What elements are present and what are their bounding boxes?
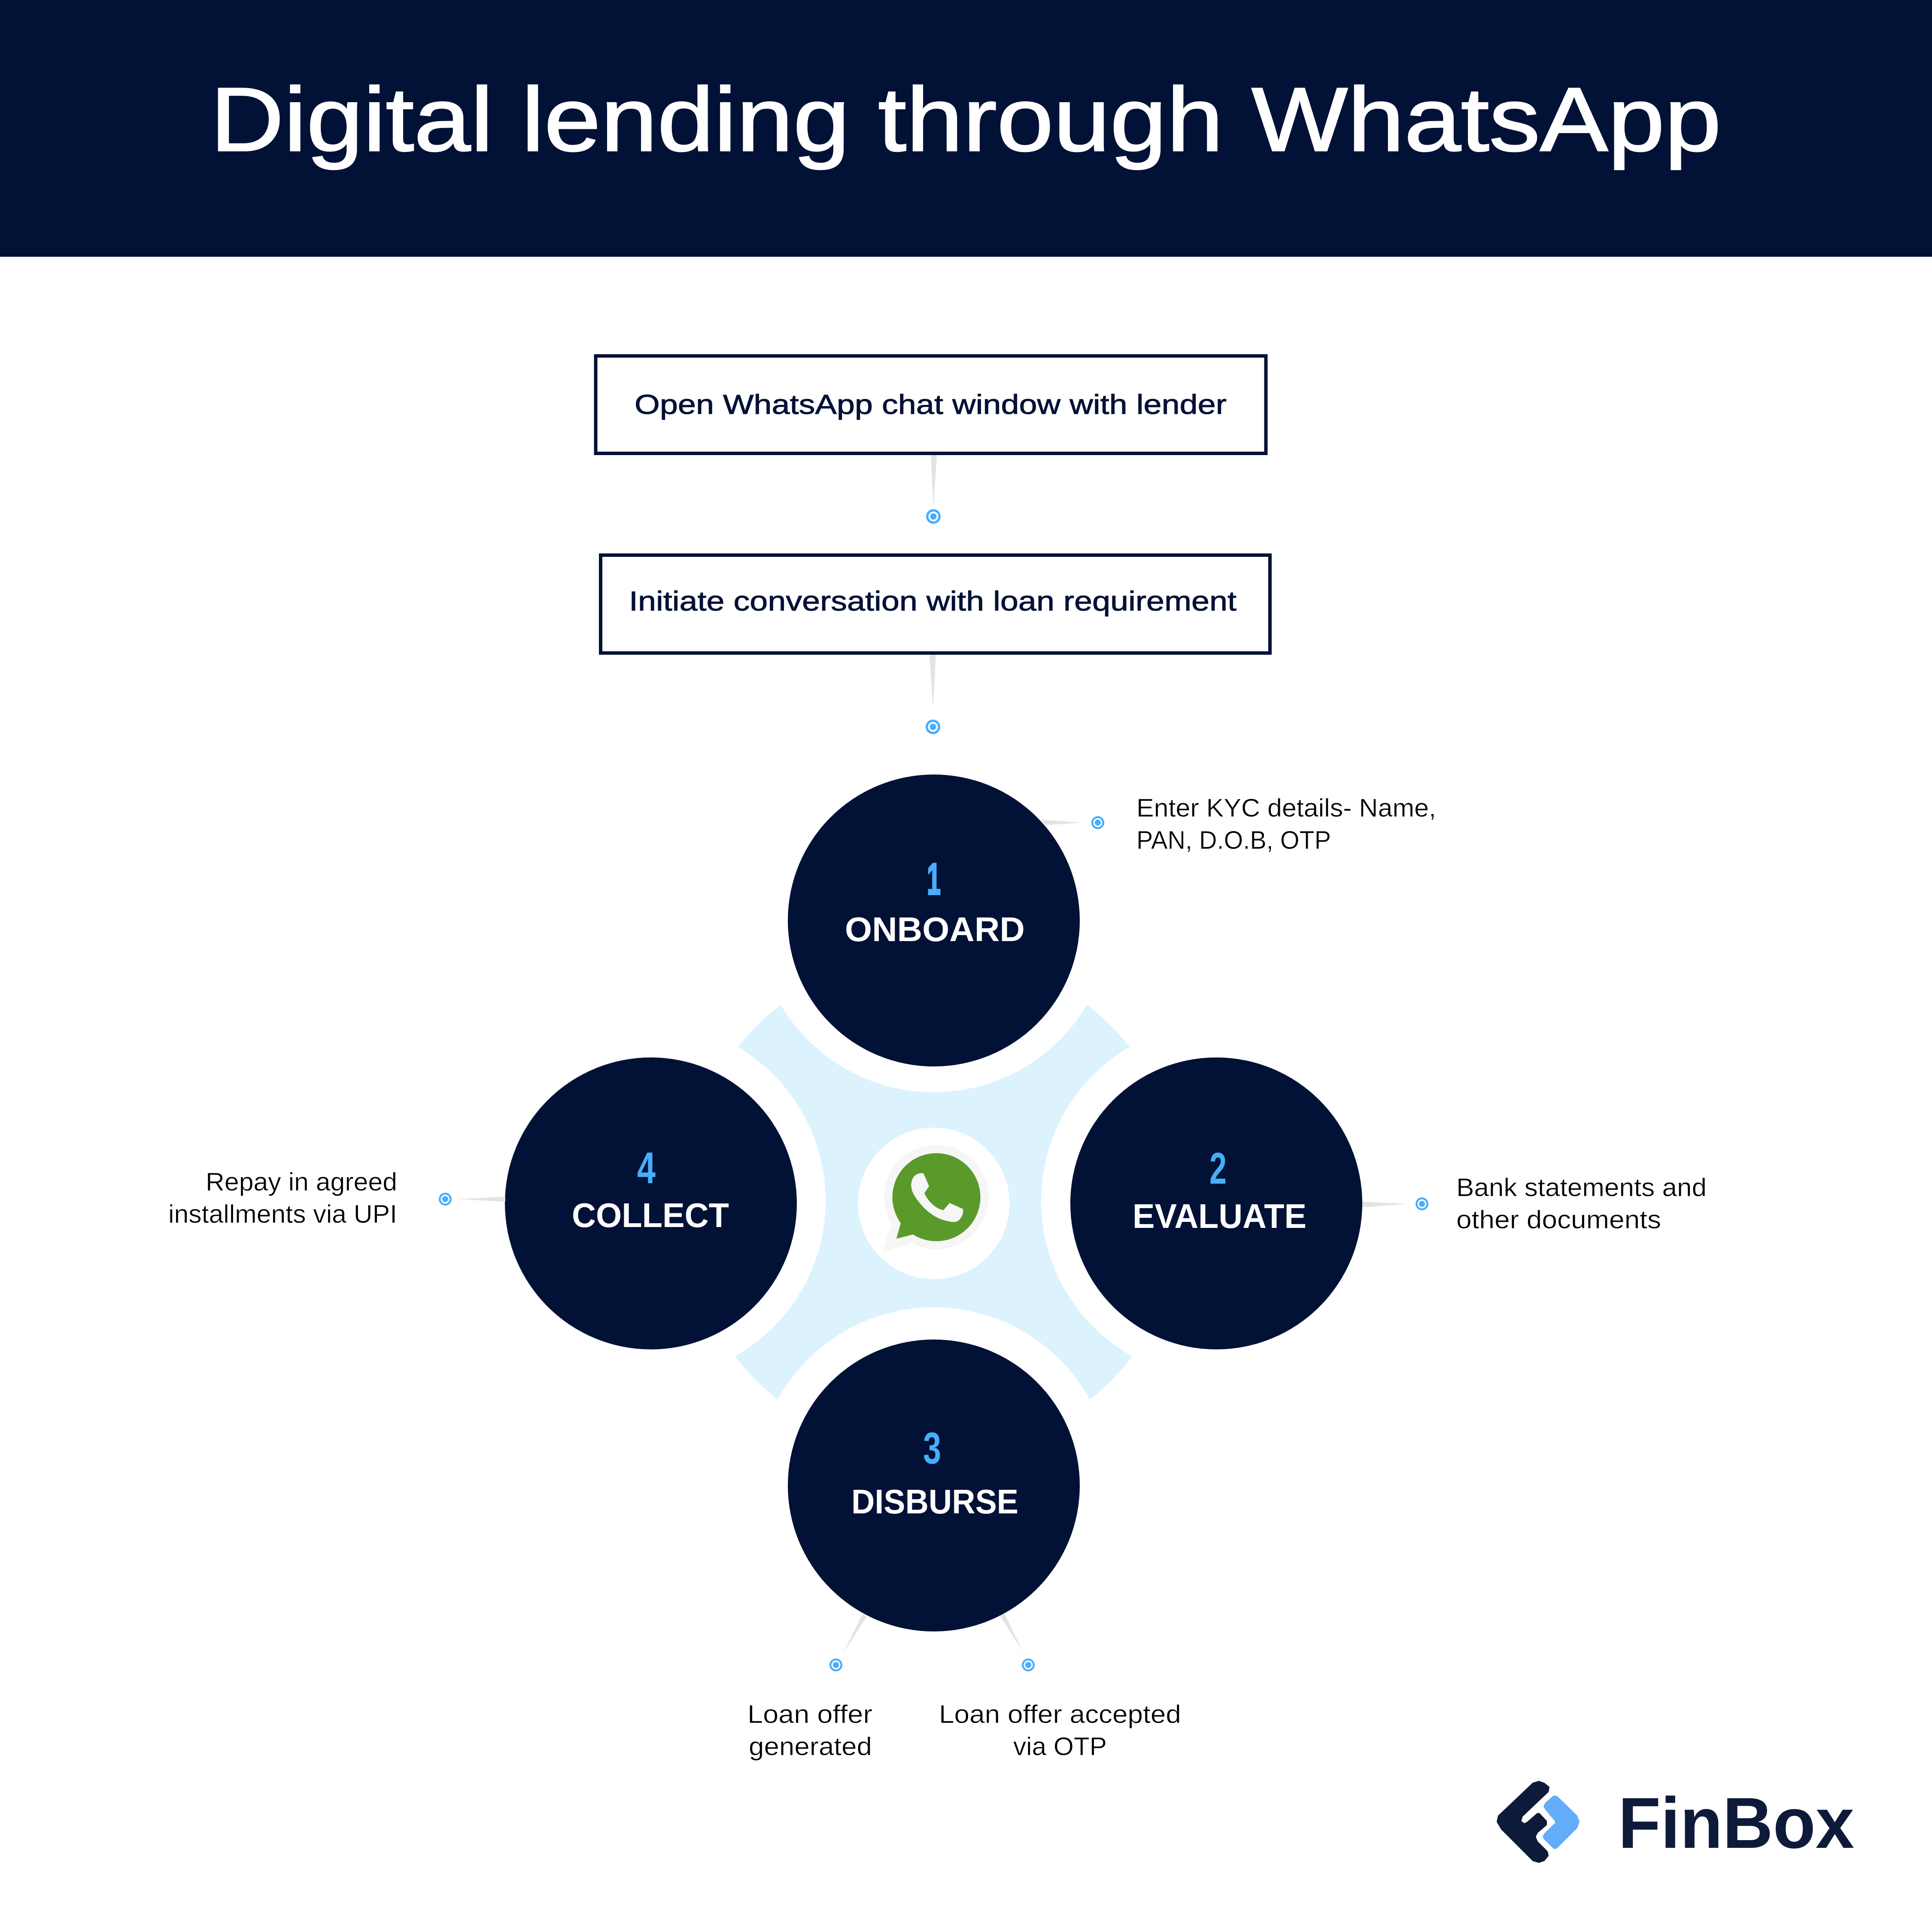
callout: loan generated dot (829, 1659, 842, 1671)
callout: loan accepted connector (1000, 1614, 1023, 1652)
step circle: disburse: 3 (923, 1424, 941, 1473)
connector: box 2 to dot (930, 655, 936, 708)
connector: box 1 to dot (931, 455, 937, 509)
dot marker 2 (926, 720, 940, 734)
callout: repay connector (458, 1197, 505, 1202)
header banner (0, 0, 1932, 257)
step box: initiate conversation: Initiate conversation with loan requirement (629, 586, 1236, 617)
step circle: onboard: ONBOARD (845, 910, 1025, 948)
callout text: loan offer accepted: via OTP (1013, 1732, 1107, 1761)
step circle: disburse: DISBURSE (851, 1482, 1018, 1521)
step circle: evaluate (1070, 1057, 1362, 1349)
step box: open chat: Open WhatsApp chat window with lender (635, 389, 1227, 420)
callout text: bank statements (1456, 1173, 1707, 1234)
step box: open chat (596, 356, 1266, 453)
step circle: collect: 4 (637, 1143, 656, 1193)
logo wordmark: FinBox (1618, 1783, 1854, 1863)
callout text: bank statements: other documents (1456, 1206, 1661, 1234)
callout text: loan offer generated: Loan offer (747, 1700, 872, 1728)
callout text: KYC details (1136, 794, 1436, 854)
icon: WhatsApp (882, 1145, 988, 1252)
callout: loan generated connector (842, 1614, 867, 1654)
callout: documents dot (1416, 1197, 1428, 1210)
callout: documents connector (1362, 1202, 1408, 1207)
callout: KYC connector (1041, 820, 1082, 825)
logo: FinBox (1498, 1782, 1854, 1863)
callout text: KYC details: PAN, D.O.B, OTP (1136, 826, 1331, 854)
dot marker 1 (926, 509, 941, 524)
centre white circle (858, 1127, 1010, 1279)
callout text: KYC details: Enter KYC details- Name, (1136, 794, 1436, 822)
callout text: repay: installments via UPI (168, 1200, 397, 1228)
callout text: loan offer generated (747, 1700, 872, 1761)
step circle: disburse (788, 1340, 1080, 1631)
callout: repay dot (439, 1193, 452, 1206)
title: Digital lending through WhatsApp (210, 69, 1721, 170)
callout text: loan offer generated: generated (749, 1732, 872, 1761)
callout text: repay: Repay in agreed (206, 1168, 397, 1196)
callout text: repay (168, 1168, 397, 1228)
callout text: loan offer accepted (939, 1700, 1181, 1761)
step circle: onboard: 1 (927, 854, 941, 904)
logo mark dark (1498, 1782, 1549, 1862)
logo mark blue (1543, 1796, 1579, 1848)
callout text: bank statements: Bank statements and (1456, 1173, 1707, 1202)
step circle: onboard (788, 775, 1080, 1066)
step circle: collect: COLLECT (572, 1196, 729, 1234)
step box: initiate conversation (601, 555, 1270, 653)
callout: KYC dot (1091, 816, 1104, 829)
step circle: evaluate: EVALUATE (1133, 1197, 1306, 1235)
light blue cross background (468, 737, 1397, 1664)
step circle: collect (505, 1057, 797, 1349)
callout: loan accepted dot (1022, 1659, 1035, 1671)
callout text: loan offer accepted: Loan offer accepted (939, 1700, 1181, 1728)
step circle: evaluate: 2 (1209, 1144, 1227, 1194)
